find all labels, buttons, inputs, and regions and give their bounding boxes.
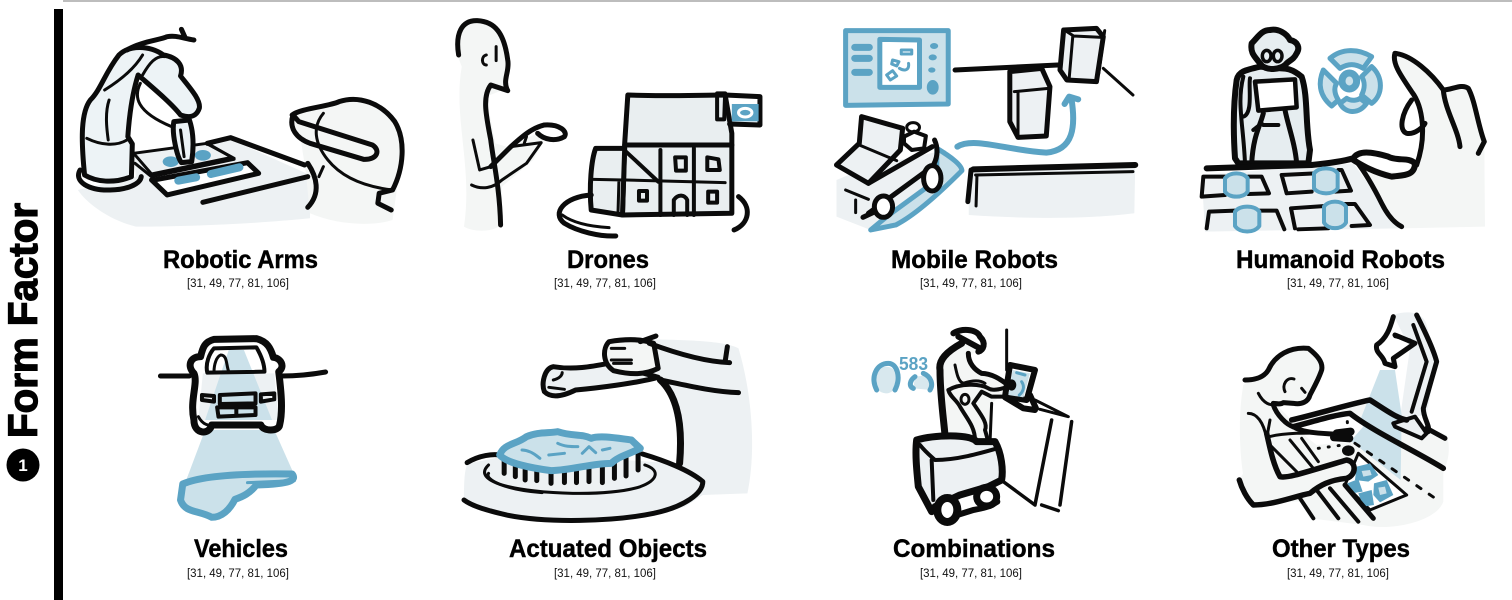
heading: Mobile Robots bbox=[891, 246, 1058, 274]
heading: Other Types bbox=[1272, 535, 1410, 563]
section heading: Form Factor bbox=[0, 203, 46, 482]
icon: humanoid robot, gesture control and hand bbox=[1202, 30, 1485, 232]
number badge: 1 bbox=[18, 456, 28, 475]
heading: Robotic Arms bbox=[163, 246, 318, 274]
panel: humanoid robots bbox=[1202, 30, 1485, 290]
icon: hands above shape-changing pin display bbox=[464, 336, 752, 520]
citation: [31, 49, 77, 81, 106] bbox=[554, 568, 656, 580]
citation: [31, 49, 77, 81, 106] bbox=[920, 278, 1022, 290]
heading: Humanoid Robots bbox=[1236, 246, 1445, 274]
citation: [31, 49, 77, 81, 106] bbox=[1287, 278, 1389, 290]
icon: mobile robot moving boxes with a control screen bbox=[836, 28, 1135, 230]
heading: Actuated Objects bbox=[509, 535, 707, 563]
panel: robotic arms bbox=[78, 29, 404, 290]
panel: vehicles bbox=[160, 339, 326, 580]
icon: robotic arm and person bbox=[78, 29, 404, 227]
panel: mobile robots bbox=[836, 28, 1135, 290]
heading: Drones bbox=[567, 246, 649, 274]
icon: person on cart with tablet and counter bbox=[874, 330, 1072, 522]
icon: car projecting on road with hand gesture bbox=[160, 339, 326, 517]
citation: [31, 49, 77, 81, 106] bbox=[554, 278, 656, 290]
heading: Combinations bbox=[893, 535, 1055, 563]
panel: drones bbox=[457, 21, 760, 290]
panel: combinations bbox=[874, 330, 1072, 580]
number badge bbox=[6, 448, 40, 482]
citation: [31, 49, 77, 81, 106] bbox=[187, 568, 289, 580]
citation: [31, 49, 77, 81, 106] bbox=[920, 568, 1022, 580]
panel: actuated objects bbox=[464, 336, 752, 580]
icon: person at desk under a projector bbox=[1239, 312, 1449, 527]
citation: [31, 49, 77, 81, 106] bbox=[187, 278, 289, 290]
icon: person directing a drone at a building bbox=[457, 21, 760, 236]
text: floating number: 583 bbox=[899, 354, 928, 374]
vertical section bar bbox=[54, 9, 63, 600]
heading: Vehicles bbox=[194, 535, 288, 563]
citation: [31, 49, 77, 81, 106] bbox=[1287, 568, 1389, 580]
section title: Form Factor bbox=[0, 203, 46, 438]
panel: other types bbox=[1239, 312, 1449, 580]
